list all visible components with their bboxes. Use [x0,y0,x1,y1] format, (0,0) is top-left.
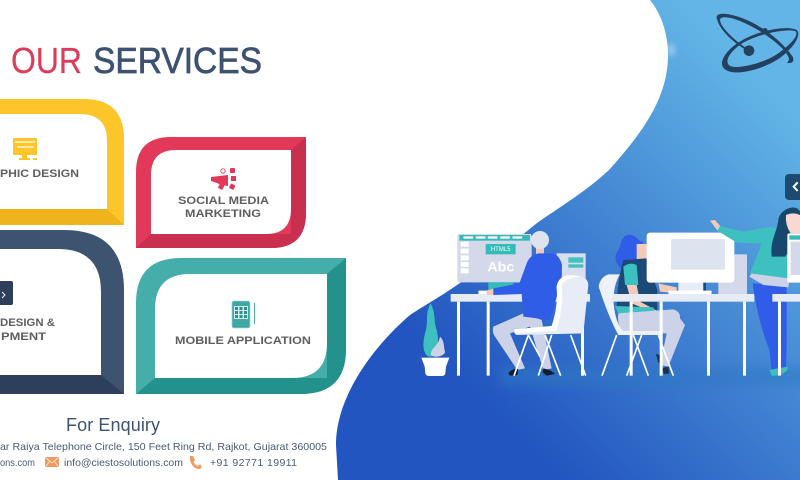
label: social media marketing: SOCIAL MEDIA [178,195,269,207]
panel: web design and development [0,230,124,394]
footer: enquiry heading: For Enquiry [66,415,160,435]
back tab [785,174,800,200]
icon: phone [190,456,202,469]
chair 2 [599,274,673,376]
logo: atom [717,14,798,72]
footer: website: ons.com [0,457,35,469]
footer: phone number: +91 92771 19911 [210,457,297,469]
desk 2 and monitor [612,233,754,376]
man seated [486,231,562,376]
title: OUR [11,40,82,81]
woman seated [615,235,685,374]
chair 1 [514,275,588,376]
label: web design and development [0,317,55,343]
label: graphic design: PHIC DESIGN [0,168,79,180]
label: social media marketing: MARKETING [185,208,261,220]
wave edge glare [667,44,675,56]
icon: monitor [13,138,37,160]
floor band [500,367,800,386]
icon: envelope [45,457,59,467]
woman standing [710,208,800,376]
desk 1 and monitors: HTML5 [491,247,511,253]
footer: email: info@ciestosolutions.com [64,457,183,469]
title [11,40,262,81]
desk 1 and monitors: Abc [487,258,515,274]
desk 1 and monitors [451,234,590,376]
icon: megaphone [211,168,236,190]
panel: graphic design [0,99,124,225]
label: web design and development: DESIGN & [0,317,55,329]
desk 3 and monitor [772,233,800,376]
title: SERVICES [93,40,262,81]
label: social media marketing [178,195,269,220]
panel: social media marketing [136,137,306,248]
blue wave background [336,0,800,480]
label: web design and development: PMENT [1,331,46,343]
footer: address: ar Raiya Telephone Circle, 150 Feet Ring Rd, Rajkot, Gujarat 360005 [0,441,327,453]
illustration: office team [421,174,800,376]
icon: code window [0,281,13,305]
panel: mobile application [136,258,346,394]
icon: mobile phone [232,301,255,328]
label: mobile application: MOBILE APPLICATION [175,335,311,347]
plant [421,303,449,376]
